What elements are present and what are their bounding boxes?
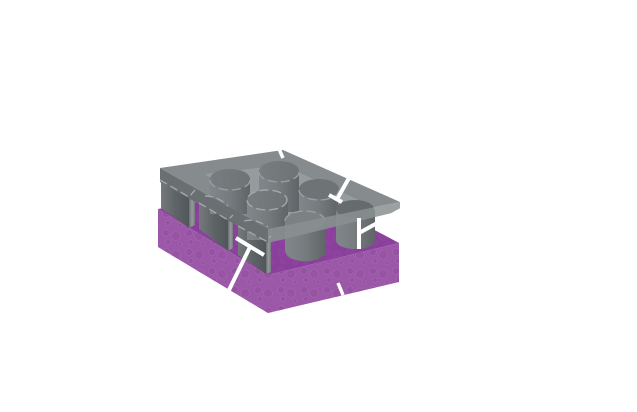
cylinders <box>210 161 375 261</box>
label line: top tick <box>279 149 283 158</box>
plate top surface <box>160 150 400 229</box>
cylinder front <box>285 211 326 261</box>
cylinder middle <box>247 190 288 240</box>
cylinder back centre <box>259 161 299 212</box>
square pillars <box>161 180 271 274</box>
label line: right with T-bar <box>359 210 401 249</box>
cylinder back left <box>210 169 250 214</box>
plate inner recess <box>205 165 365 222</box>
plate front and side faces <box>160 168 400 243</box>
label line: bottom tick <box>338 283 343 295</box>
cylinder back right <box>299 179 339 225</box>
purple base block <box>158 185 399 313</box>
label line: upper right with T-bar <box>329 178 349 202</box>
label line: bottom-left with T-bar <box>229 238 264 290</box>
cylinder right <box>336 200 375 249</box>
